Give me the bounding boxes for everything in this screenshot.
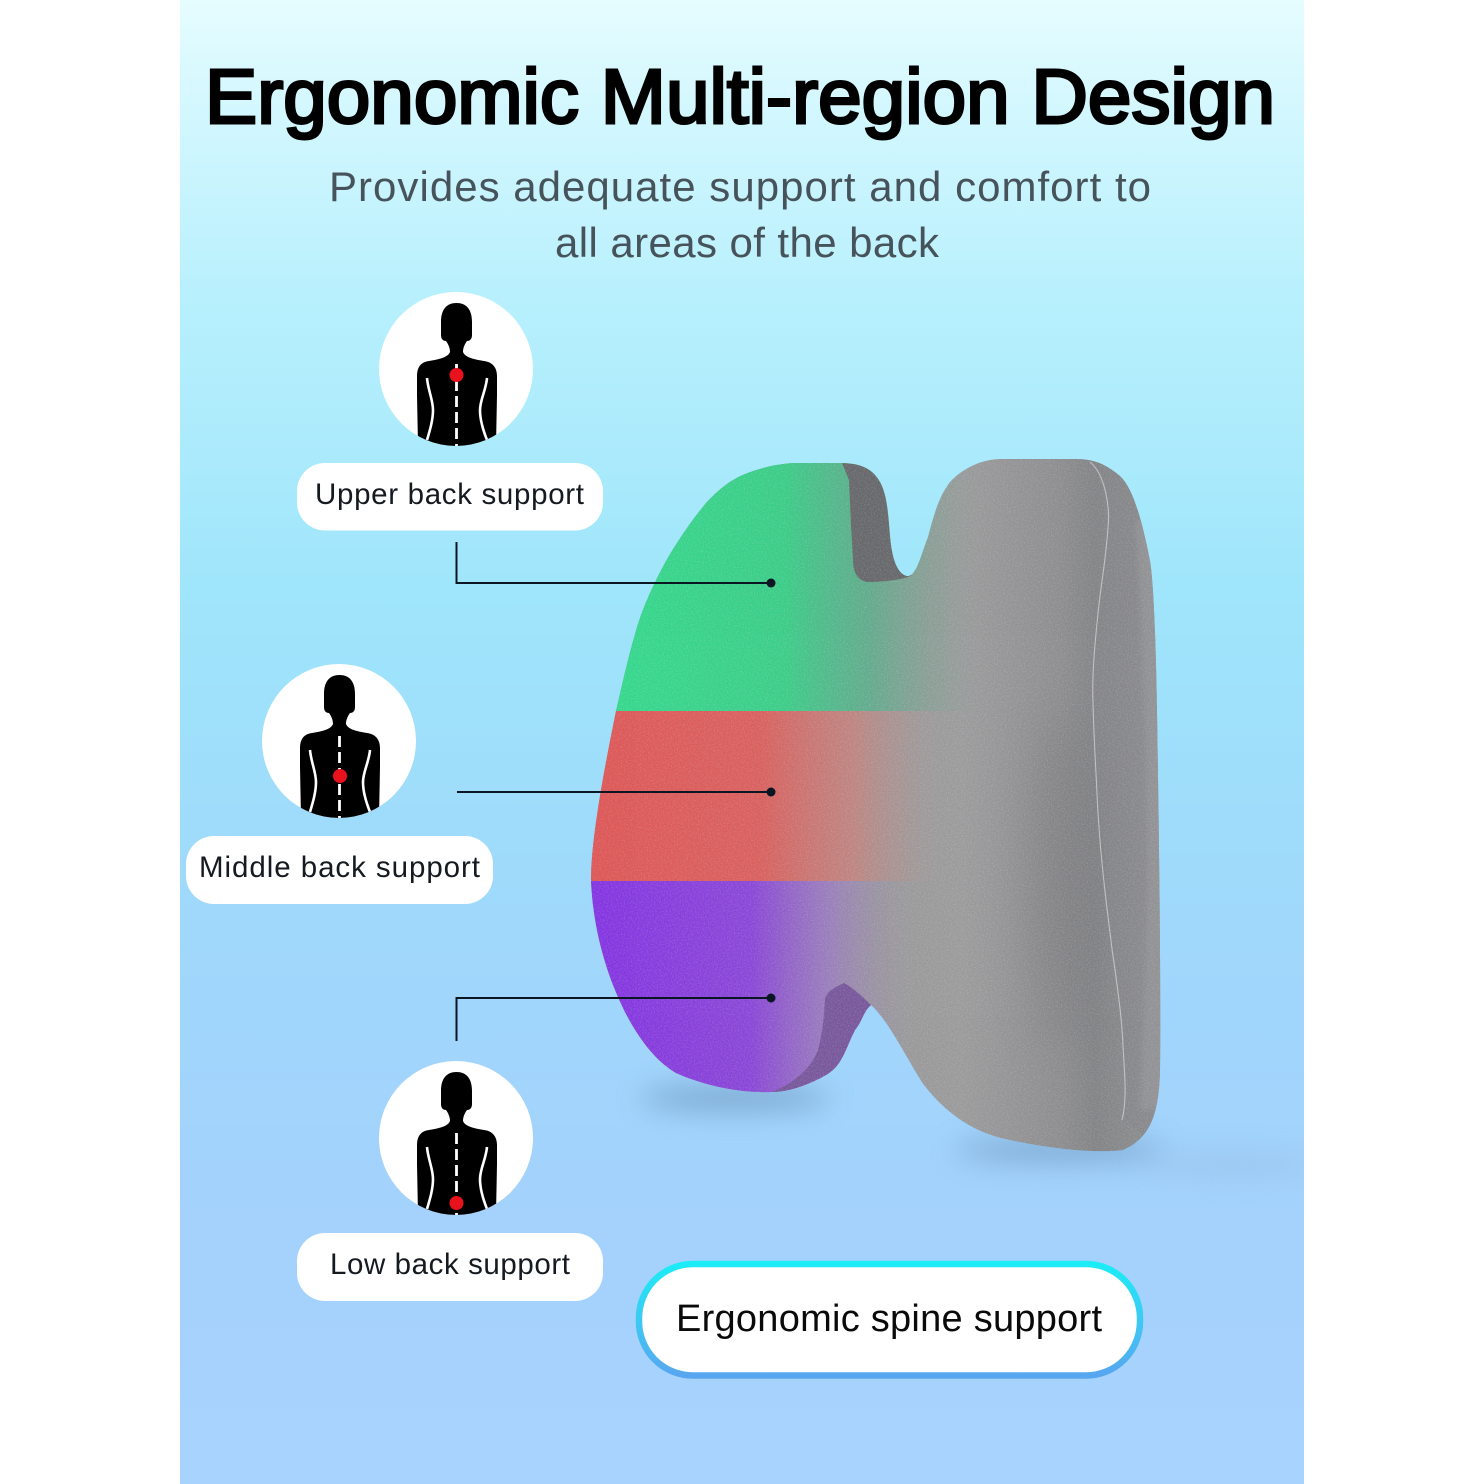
subtitle: Provides adequate support and comfort to (329, 163, 1151, 210)
title: Ergonomic Multi-region Design (205, 54, 1275, 140)
label: upper back support (297, 463, 603, 530)
lower notch inner fabric (772, 983, 871, 1092)
subtitle (329, 163, 1151, 266)
upper notch inner fabric (842, 463, 912, 582)
subtitle: all areas of the back (555, 219, 940, 266)
callout: ergonomic spine support: Ergonomic spine support (676, 1298, 1102, 1340)
cushion (585, 455, 1170, 1160)
label: upper back support: Upper back support (315, 478, 584, 511)
label: middle back support (186, 836, 493, 904)
callout: ergonomic spine support (639, 1264, 1140, 1376)
label: low back support: Low back support (330, 1248, 570, 1281)
icon: upper back figure (379, 292, 533, 446)
label: middle back support: Middle back support (199, 851, 480, 884)
icon: middle back figure (262, 664, 416, 818)
background panel (180, 0, 1304, 1484)
label: low back support (297, 1233, 603, 1301)
fabric texture (585, 455, 1165, 1155)
purple zone (591, 881, 881, 1092)
connector: upper back (456, 542, 776, 588)
icon: low back figure (379, 1061, 533, 1215)
gray body (590, 455, 1165, 1155)
cushion shadows (640, 1086, 1320, 1173)
red zone (591, 711, 913, 881)
connector: middle back (457, 788, 776, 796)
connector: low back (456, 994, 776, 1041)
green zone (616, 463, 950, 711)
seam (1090, 462, 1125, 1120)
